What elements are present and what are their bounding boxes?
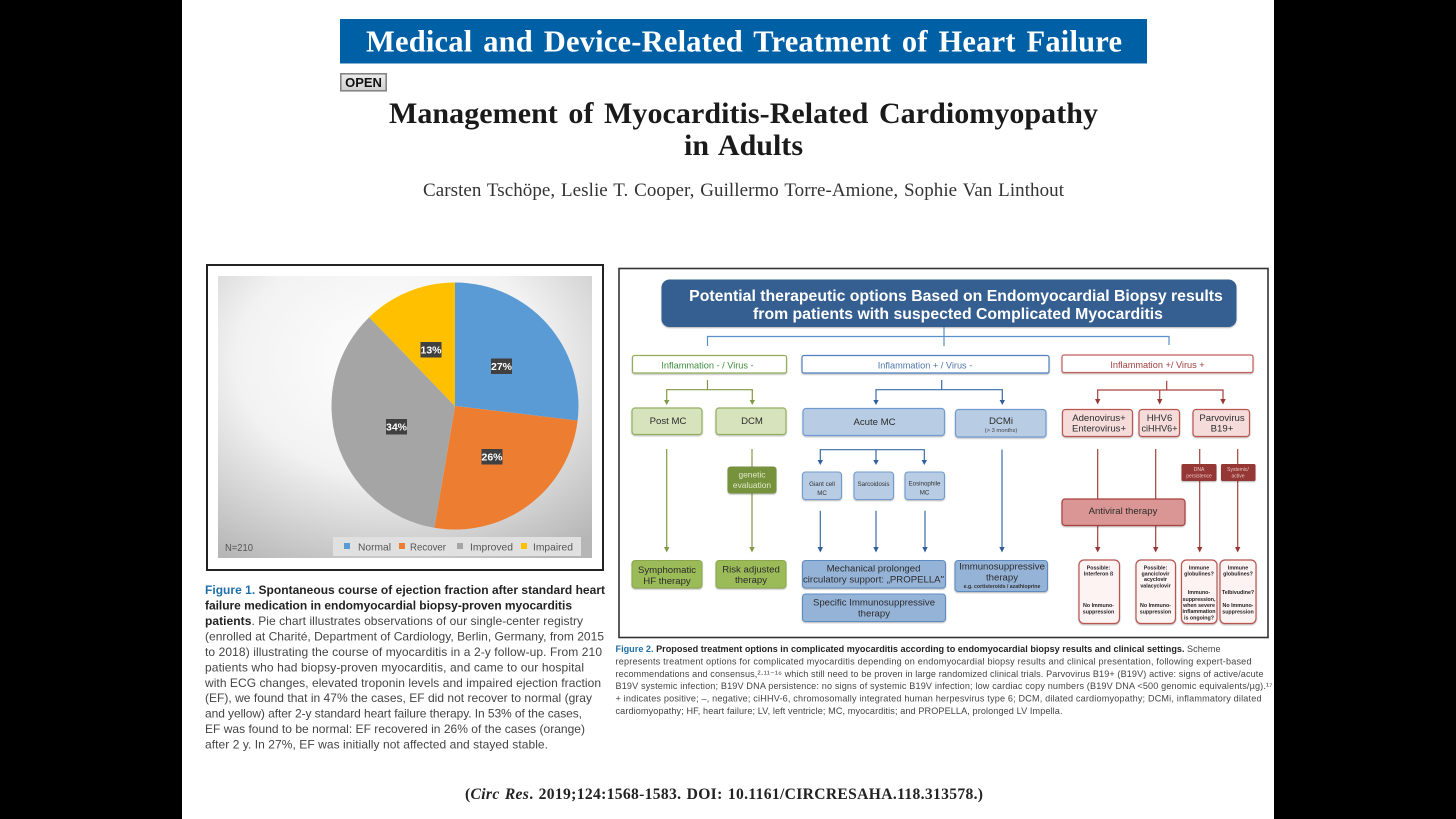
pie slice: normal 27% bbox=[455, 282, 578, 421]
banner: section heading: Medical and Device-Related Treatment of Heart Failure bbox=[366, 24, 1122, 58]
legend: Impaired bbox=[533, 542, 573, 554]
antiviral therapy box: Antiviral therapy bbox=[1089, 506, 1158, 517]
caption: figure 2: B19V systemic infection; B19V DNA persistence: no signs of systemic B19V infection; low cardiac copy numbers (B19V DNA <500 genomic equivalents/µg).¹⁷ bbox=[616, 681, 1272, 691]
risk adjusted therapy box bbox=[716, 560, 786, 588]
label 13%: 13% bbox=[420, 344, 442, 356]
genetic evaluation box: genetic bbox=[738, 470, 766, 480]
immunosuppressive therapy box: Immunosuppressive bbox=[959, 562, 1045, 572]
arrow: DCM to therapy bbox=[749, 449, 755, 552]
legend: Improved bbox=[470, 542, 513, 554]
specific immunosuppressive therapy box: therapy bbox=[858, 608, 890, 620]
flowchart title: from patients with suspected Complicated Myocarditis bbox=[753, 306, 1163, 323]
legend: Recover bbox=[410, 542, 446, 554]
DNA persistence box: DNA bbox=[1194, 467, 1205, 473]
genetic evaluation box bbox=[728, 466, 776, 494]
arrow: DCMi to therapy bbox=[999, 450, 1005, 552]
white page bbox=[182, 0, 1274, 819]
adenovirus enterovirus box: Enterovirus+ bbox=[1072, 424, 1126, 434]
post MC box: Post MC bbox=[650, 416, 686, 427]
outcome box: immune globulines and immunosuppression: when severe bbox=[1182, 603, 1215, 609]
outcome box: interferon bbox=[1079, 560, 1120, 624]
caption: figure 1: patients. Pie chart illustrates observations of our single-center registry bbox=[205, 614, 583, 628]
connector arrows bbox=[1095, 381, 1226, 404]
immunosuppressive therapy box: therapy bbox=[986, 572, 1018, 584]
caption: figure 2: Figure 2. Proposed treatment options in complicated myocarditis according to endomyocardial biopsy results and clinical settings. Scheme bbox=[616, 644, 1220, 654]
acute MC box: Acute MC bbox=[853, 417, 896, 428]
HHV6 box bbox=[1139, 410, 1180, 436]
flowchart title bbox=[662, 280, 1236, 327]
DCMi box: DCMi bbox=[989, 416, 1013, 427]
symptomatic therapy box bbox=[632, 560, 702, 588]
flowchart title: Potential therapeutic options Based on Endomyocardial Biopsy results bbox=[689, 288, 1223, 305]
caption: figure 1: (EF), we found that in 47% the cases, EF did not recover to normal (gray bbox=[205, 691, 592, 705]
header box bbox=[1062, 355, 1253, 372]
mechanical support box: circulatory support: „PROPELLA" bbox=[803, 574, 944, 586]
parvovirus box: B19+ bbox=[1211, 424, 1234, 434]
adenovirus enterovirus box: Adenovirus+ bbox=[1072, 413, 1126, 424]
caption: figure 2: cardiomyopathy; HF, heart failure; LV, left ventricle; MC, myocarditis; and PROPELLA, prolonged LV Impella. bbox=[616, 706, 1062, 716]
outcome box: immune globulines and immunosuppression: suppression, bbox=[1183, 597, 1216, 603]
caption: figure 1: and yellow) after 2-y standard heart failure therapy. In 53% of the cases, bbox=[205, 707, 582, 721]
systemic active box bbox=[1221, 464, 1256, 481]
genetic evaluation box: evaluation bbox=[733, 480, 771, 490]
immunosuppressive therapy box bbox=[955, 560, 1048, 592]
eosinophile MC box: MC bbox=[920, 490, 930, 496]
legend: Normal bbox=[358, 542, 391, 554]
specific immunosuppressive therapy box: Specific Immunosuppressive bbox=[813, 598, 935, 608]
caption: figure 1: Figure 1. Spontaneous course of ejection fraction after standard heart bbox=[205, 583, 605, 597]
outcome box: immune globulines and telbivudine: Telbivudine? bbox=[1222, 590, 1254, 596]
giant cell MC box: Giant cell bbox=[809, 481, 835, 488]
panel: figure 1 pie chart bbox=[207, 265, 603, 570]
outcome box: immune globulines and immunosuppression: Immuno- bbox=[1188, 590, 1210, 596]
authors: Carsten Tschöpe, Leslie T. Cooper, Guillermo Torre-Amione, Sophie Van Linthout bbox=[423, 180, 1065, 201]
outcome box: ganciclovir: suppression bbox=[1140, 610, 1171, 616]
outcome box: interferon: No Immuno- bbox=[1083, 603, 1114, 609]
sample size: N=210 bbox=[225, 542, 253, 554]
panel: figure 2 flowchart bbox=[619, 268, 1268, 638]
outcome box: immune globulines and telbivudine: globulines? bbox=[1223, 572, 1253, 578]
caption: figure 1: after 2 y. In 27%, EF was initially not affected and stayed stable. bbox=[205, 738, 548, 752]
open access badge: OPEN bbox=[345, 75, 382, 90]
header box bbox=[802, 356, 1049, 373]
connector: acute MC subtypes bbox=[818, 450, 927, 465]
outcome box: ganciclovir: valacyclovir bbox=[1140, 584, 1171, 590]
DCM box bbox=[716, 408, 786, 434]
caption: figure 1: (enrolled at Charité, Department of Cardiology, Berlin, Germany, from 2015 bbox=[205, 629, 604, 643]
outcome box: interferon: Possible: bbox=[1087, 566, 1111, 572]
specific immunosuppressive therapy box bbox=[802, 594, 946, 622]
parvovirus box bbox=[1193, 410, 1250, 436]
caption: figure 1: EF was found to be normal: EF recovered in 26% of the cases (orange) bbox=[205, 722, 585, 736]
label 26%: 26% bbox=[481, 452, 503, 464]
HHV6 box: ciHHV6+ bbox=[1142, 424, 1178, 434]
symptomatic therapy box: Symphomatic bbox=[638, 565, 696, 576]
arrows to mechanical support bbox=[818, 511, 928, 552]
outcome box: ganciclovir: acyclovir bbox=[1144, 577, 1167, 583]
sarcoidosis box: Sarcoidosis bbox=[858, 481, 889, 488]
outcome box: immune globulines and telbivudine: suppression bbox=[1222, 610, 1254, 616]
label 27%: 27% bbox=[491, 361, 513, 373]
systemic active box: active bbox=[1231, 474, 1245, 480]
connector arrows bbox=[873, 380, 1005, 405]
outcome box: ganciclovir: Possible: bbox=[1144, 566, 1168, 572]
outcome box: immune globulines and immunosuppression: globulines? bbox=[1184, 572, 1214, 578]
caption: figure 1: with ECG changes, elevated troponin levels and impaired ejection fraction bbox=[204, 676, 601, 690]
caption: figure 2: recommendations and consensus,²·¹¹⁻¹⁶ which still need to be proven in large randomized clinical trials. Parvovirus B19+ (B19V) active: signs of active/acute bbox=[616, 669, 1264, 679]
label 34%: 34% bbox=[386, 422, 408, 434]
giant cell MC box: MC bbox=[817, 490, 827, 497]
DCMi box: (> 3 months) bbox=[985, 428, 1017, 434]
DNA persistence box bbox=[1182, 464, 1216, 481]
header box: Inflammation +/ Virus + bbox=[1110, 360, 1205, 370]
arrow: post MC to therapy bbox=[664, 449, 669, 552]
title bbox=[389, 97, 1098, 162]
header box: Inflammation + / Virus - bbox=[878, 360, 972, 370]
post MC box bbox=[632, 408, 702, 434]
DCMi box bbox=[956, 410, 1046, 437]
top connector bbox=[708, 327, 1169, 346]
mechanical support box: Mechanical prolonged bbox=[827, 564, 920, 574]
outcome box: interferon: Interferon ß bbox=[1084, 572, 1114, 578]
eosinophile MC box: Eosinophile bbox=[908, 480, 941, 488]
risk adjusted therapy box: therapy bbox=[735, 575, 767, 586]
citation: (Circ Res. 2019;124:1568-1583. DOI: 10.1161/CIRCRESAHA.118.313578.) bbox=[465, 786, 983, 803]
column: inflammation positive virus positive bbox=[1062, 355, 1256, 624]
parvovirus box: Parvovirus bbox=[1199, 413, 1245, 424]
immunosuppressive therapy box: e.g. cortisteroids / azathioprine bbox=[964, 584, 1040, 590]
systemic active box: Systemic/ bbox=[1227, 467, 1249, 473]
risk adjusted therapy box: Risk adjusted bbox=[722, 564, 780, 576]
caption: figure 2 bbox=[616, 644, 1272, 716]
arrows to outcomes bbox=[1095, 449, 1240, 552]
HHV6 box: HHV6 bbox=[1147, 413, 1172, 424]
caption: figure 2: represents treatment options for complicated myocarditis depending on endomyocardial biopsy results and clinical presentation, following expert-based bbox=[616, 656, 1252, 666]
header box: Inflammation - / Virus - bbox=[661, 360, 754, 370]
sarcoidosis box bbox=[854, 472, 894, 500]
eosinophile MC box bbox=[905, 472, 944, 500]
outcome box: ganciclovir bbox=[1136, 560, 1176, 624]
caption: figure 1: to 2018) illustrating the course of myocarditis in a 2-y follow-up. From 210 bbox=[205, 645, 602, 659]
outcome box: ganciclovir: ganciclovir bbox=[1142, 572, 1169, 578]
caption: figure 1: patients who had biopsy-proven myocarditis, and came to our hospital bbox=[205, 660, 584, 674]
caption: figure 1: failure medication in endomyocardial biopsy-proven myocarditis bbox=[205, 598, 572, 612]
column: inflammation negative virus negative bbox=[632, 356, 786, 588]
column: inflammation positive virus negative bbox=[802, 356, 1049, 622]
DCM box: DCM bbox=[741, 416, 763, 427]
caption: figure 2: + indicates positive; –, negative; ciHHV-6, chromosomally integrated human herpesvirus type 6; DCM, dilated cardiomyopathy; DCMi, inflammatory dilated bbox=[616, 694, 1262, 704]
mechanical support box bbox=[802, 560, 946, 588]
caption: figure 1 bbox=[204, 583, 605, 752]
pie slice: improved 34% bbox=[331, 317, 455, 528]
outcome box: immune globulines and telbivudine: No Immuno- bbox=[1223, 603, 1254, 609]
title: in Adults bbox=[684, 129, 803, 162]
giant cell MC box bbox=[802, 472, 842, 500]
outcome box: ganciclovir: No Immuno- bbox=[1140, 603, 1171, 609]
outcome box: immune globulines and telbivudine bbox=[1220, 560, 1256, 624]
DNA persistence box: persistence bbox=[1186, 474, 1212, 480]
outcome box: immune globulines and immunosuppression: inflammation bbox=[1183, 609, 1215, 615]
outcome box: immune globulines and immunosuppression: is ongoing? bbox=[1184, 616, 1214, 622]
header box bbox=[632, 356, 786, 373]
outcome box: immune globulines and immunosuppression bbox=[1182, 560, 1217, 624]
connector arrows bbox=[664, 380, 755, 405]
antiviral therapy box bbox=[1062, 499, 1185, 526]
legend bbox=[333, 537, 581, 556]
pie slice: recover 26% bbox=[434, 406, 578, 530]
pie chart bbox=[331, 282, 578, 530]
symptomatic therapy box: HF therapy bbox=[643, 576, 691, 587]
outcome box: immune globulines and telbivudine: Immune bbox=[1228, 566, 1248, 572]
outcome box: immune globulines and immunosuppression: Immune bbox=[1189, 566, 1209, 572]
adenovirus enterovirus box bbox=[1062, 410, 1132, 436]
pie slice: impaired 13% bbox=[369, 282, 455, 406]
outcome box: interferon: suppression bbox=[1083, 610, 1114, 616]
acute MC box bbox=[803, 408, 944, 436]
title: Management of Myocarditis-Related Cardiomyopathy bbox=[389, 97, 1098, 130]
